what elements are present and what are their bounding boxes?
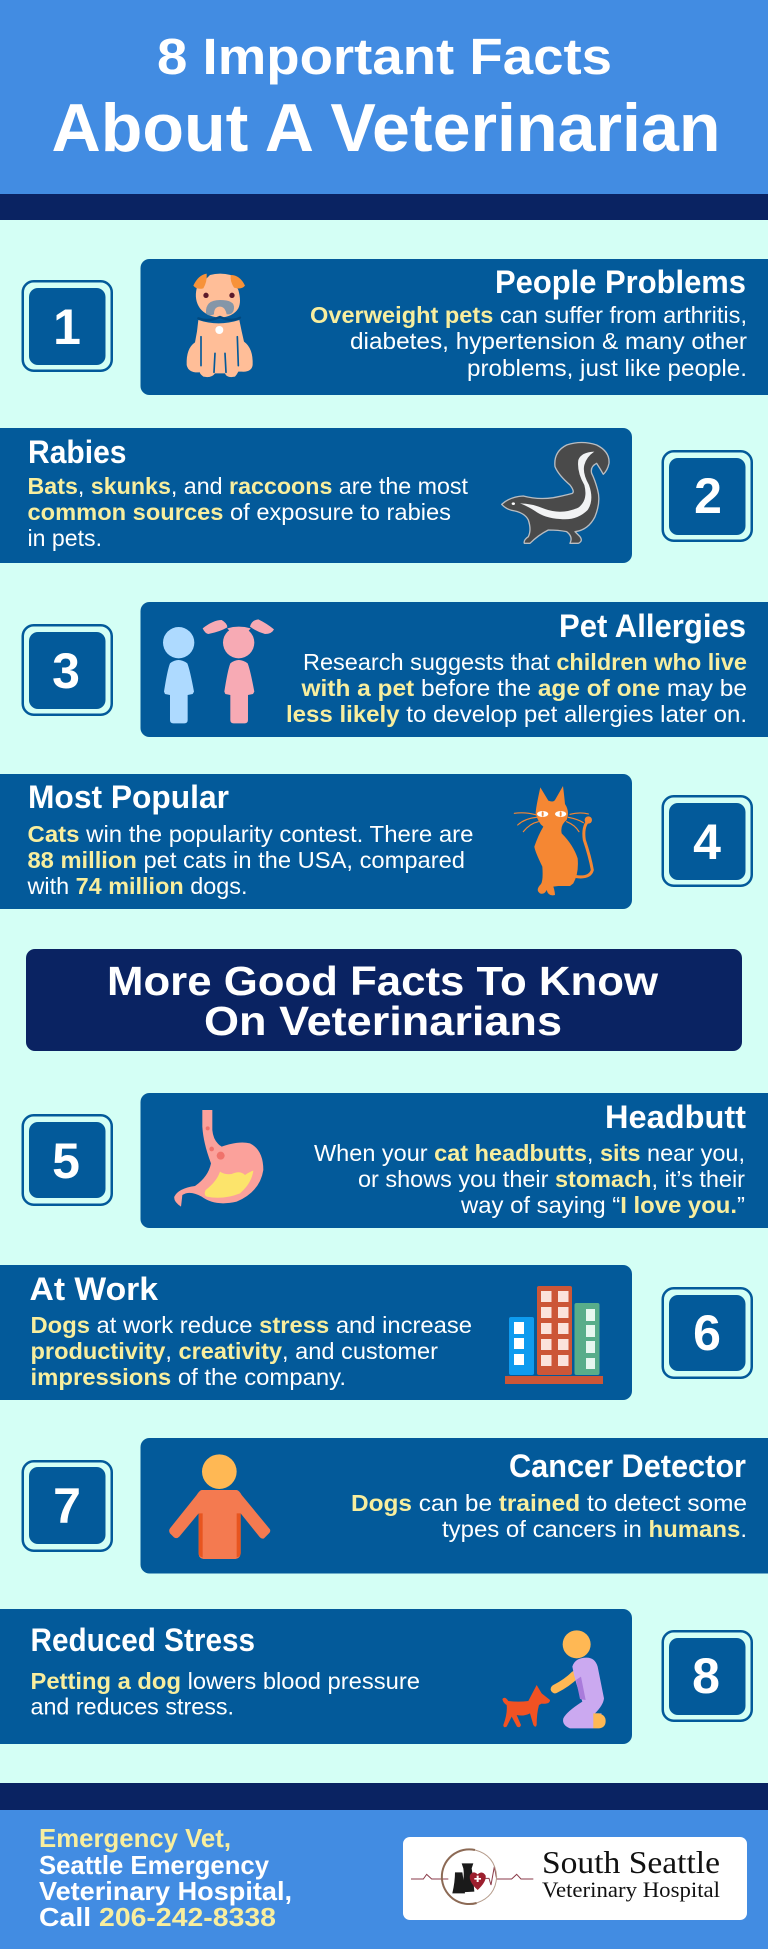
number badge 5: 5	[52, 1133, 80, 1189]
body text: Dogs can be trained to detect some	[351, 1490, 747, 1516]
logo: South Seattle Veterinary Hospital	[403, 1837, 747, 1920]
logo: South Seattle Veterinary Hospital: South Seattle	[542, 1844, 720, 1880]
icon: office buildings	[505, 1286, 603, 1384]
body text: impressions of the company.	[30, 1364, 346, 1390]
number badge 6: 6	[693, 1305, 721, 1361]
body text: Research suggests that children who live	[303, 649, 747, 675]
heading: Reduced Stress	[30, 1622, 255, 1658]
body text: Petting a dog lowers blood pressure	[30, 1668, 420, 1694]
title	[52, 28, 720, 166]
body text: When your cat headbutts, sits near you,	[314, 1140, 745, 1166]
section heading banner: On Veterinarians	[204, 998, 562, 1044]
icon: skunk	[502, 442, 609, 543]
heading: Cancer Detector	[509, 1448, 746, 1484]
number badge 3	[23, 625, 112, 715]
heading: People Problems	[495, 264, 746, 300]
number badge 2	[663, 451, 752, 541]
panel: fact 1 people problems	[140, 259, 768, 395]
icon: person petting dog	[502, 1630, 606, 1728]
body text: Overweight pets can suffer from arthritis,	[310, 302, 747, 328]
body text: 88 million pet cats in the USA, compared	[28, 847, 465, 873]
body text: and reduces stress.	[30, 1694, 234, 1720]
section heading banner	[26, 949, 742, 1051]
body text	[351, 1490, 747, 1542]
title: 8 Important Facts	[157, 28, 612, 85]
number badge 4	[663, 796, 752, 886]
icon: dog	[187, 274, 253, 377]
number badge 3: 3	[52, 643, 80, 699]
heading: Headbutt	[605, 1099, 746, 1135]
body text: diabetes, hypertension & many other	[350, 328, 747, 354]
body text	[286, 649, 747, 727]
body text: with a pet before the age of one may be	[300, 675, 747, 701]
body text	[310, 302, 747, 381]
panel: fact 8 reduced stress	[0, 1609, 632, 1744]
number badge 8	[663, 1631, 752, 1721]
contact text	[39, 1823, 292, 1932]
panel: fact 3 pet allergies	[140, 602, 768, 737]
heading: Pet Allergies	[559, 608, 746, 644]
body text: types of cancers in humans.	[442, 1516, 747, 1542]
number badge 7	[23, 1461, 112, 1551]
body text	[30, 1312, 472, 1390]
number badge 5	[23, 1115, 112, 1205]
body text: in pets.	[28, 525, 102, 551]
panel: fact 7 cancer detector	[140, 1438, 768, 1574]
panel: fact 5 headbutt	[140, 1093, 768, 1228]
logo emblem	[411, 1849, 533, 1904]
body text: Bats, skunks, and raccoons are the most	[28, 473, 469, 499]
body text	[314, 1140, 745, 1218]
body text: Cats win the popularity contest. There are	[28, 821, 474, 847]
number badge 8: 8	[692, 1648, 720, 1704]
body text: problems, just like people.	[467, 355, 747, 381]
body text: less likely to develop pet allergies later on.	[286, 701, 747, 727]
body text: or shows you their stomach, it’s their	[358, 1166, 745, 1192]
footer banner	[0, 1783, 768, 1949]
heading: Rabies	[28, 434, 126, 470]
title: About A Veterinarian	[52, 90, 720, 166]
icon: cat	[514, 786, 592, 895]
body text: with 74 million dogs.	[26, 873, 247, 899]
heading: Most Popular	[28, 779, 229, 815]
body text: way of saying “ I love you.”	[460, 1192, 745, 1218]
section heading banner: More Good Facts To Know	[107, 958, 658, 1004]
contact text: Veterinary Hospital,	[39, 1876, 292, 1906]
number badge 2: 2	[694, 468, 722, 524]
header banner	[0, 0, 768, 220]
logo: South Seattle Veterinary Hospital: Veterinary Hospital	[542, 1877, 720, 1902]
icon: boy and girl	[163, 619, 274, 723]
body text	[30, 1668, 420, 1720]
body text	[28, 473, 469, 551]
panel: fact 6 at work	[0, 1265, 632, 1400]
number badge 6	[663, 1288, 752, 1378]
body text: common sources of exposure to rabies	[28, 499, 451, 525]
body text: productivity, creativity, and customer	[30, 1338, 438, 1364]
number badge 1	[23, 281, 112, 371]
body text: Dogs at work reduce stress and increase	[30, 1312, 472, 1338]
contact text: Emergency Vet,	[39, 1823, 231, 1853]
body text	[26, 821, 474, 899]
number badge 4: 4	[693, 814, 721, 870]
number badge 1: 1	[53, 299, 81, 355]
panel: fact 2 rabies	[0, 428, 632, 563]
number badge 7: 7	[53, 1478, 81, 1534]
panel: fact 4 most popular	[0, 774, 632, 909]
contact text: Call 206-242-8338	[39, 1902, 276, 1932]
heading: At Work	[30, 1271, 158, 1307]
icon: person	[169, 1454, 270, 1559]
icon: stomach	[174, 1110, 263, 1207]
contact text: Seattle Emergency	[39, 1850, 270, 1880]
